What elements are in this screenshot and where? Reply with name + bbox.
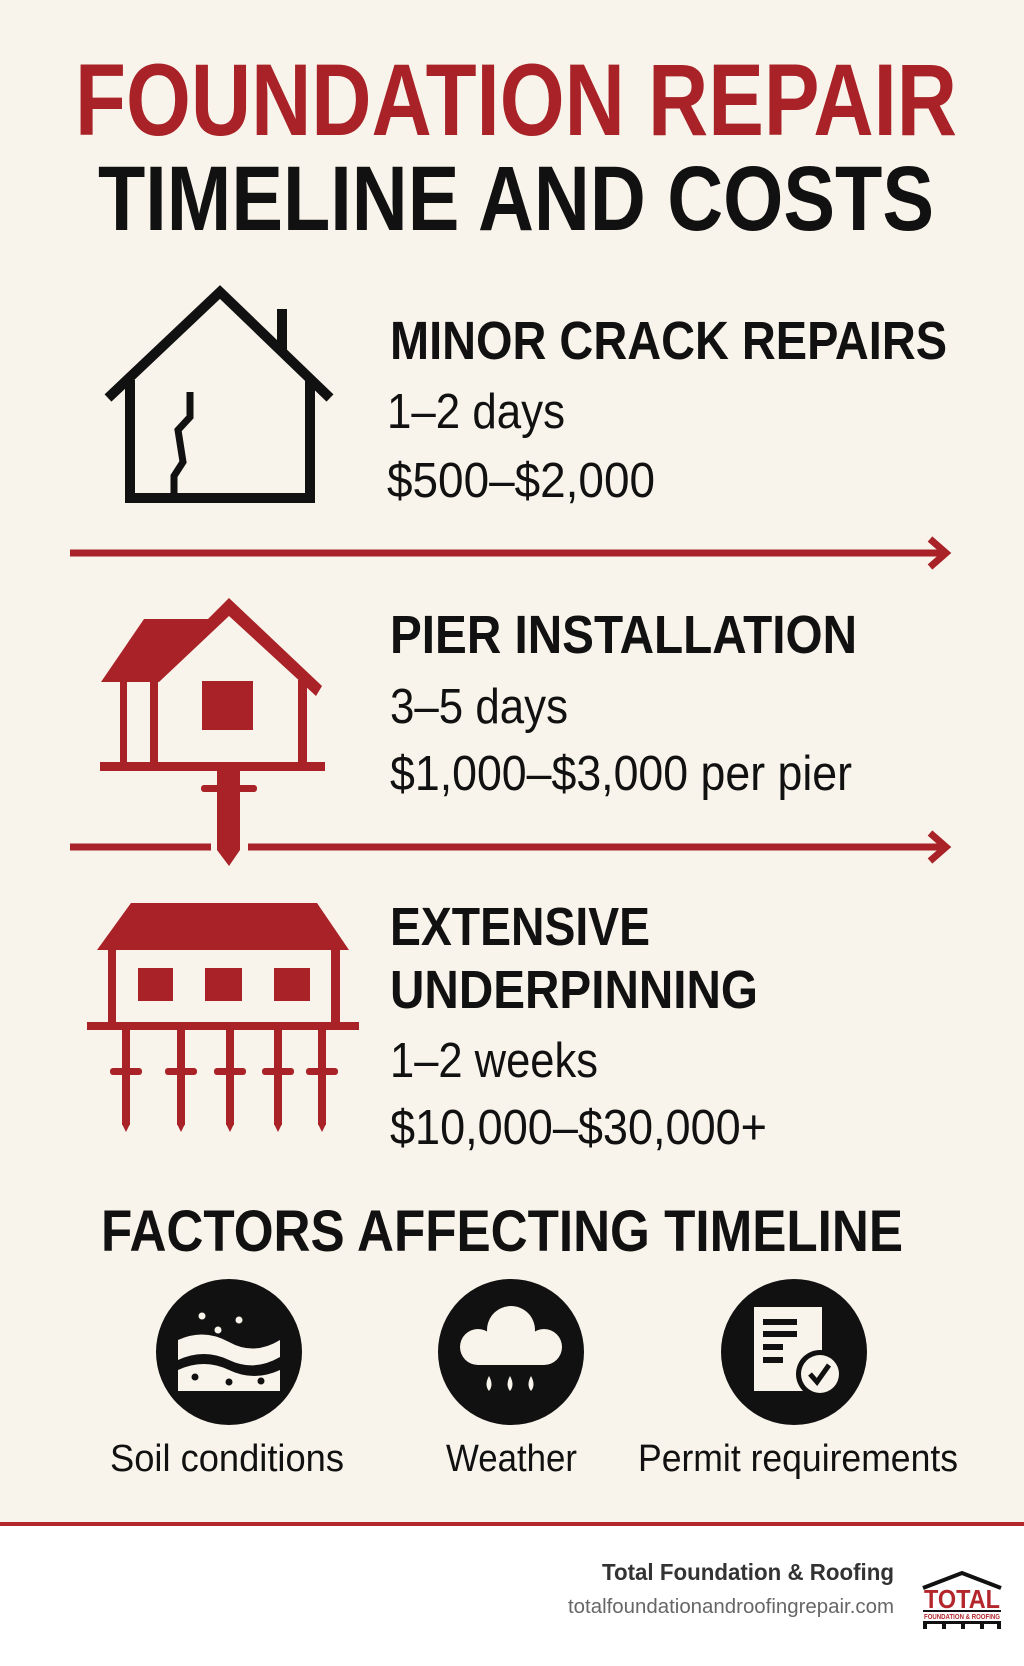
logo: FOUNDATION & ROOFING — [924, 1614, 1000, 1621]
panel: pier installation: $1,000–$3,000 per pier — [390, 747, 852, 801]
labels: factors — [110, 1438, 958, 1480]
footer text: totalfoundationandroofingrepair.com — [568, 1596, 894, 1618]
panel: extensive underpinning: 1–2 weeks — [390, 1034, 598, 1088]
arrow 2 — [70, 833, 946, 861]
icon: soil conditions — [156, 1279, 302, 1425]
arrow 1 — [70, 539, 946, 567]
panel: pier installation: PIER INSTALLATION — [390, 605, 857, 665]
icon: underpinning house — [87, 903, 359, 1132]
labels: factors: Permit requirements — [638, 1438, 958, 1480]
footer text — [568, 1559, 894, 1618]
labels: factors: Soil conditions — [110, 1438, 344, 1480]
panel: minor crack repairs — [387, 311, 947, 508]
panel: minor crack repairs: $500–$2,000 — [387, 454, 655, 508]
heading: factors: FACTORS AFFECTING TIMELINE — [101, 1199, 903, 1264]
title — [75, 43, 957, 250]
labels: factors: Weather — [446, 1438, 577, 1480]
panel: extensive underpinning: UNDERPINNING — [390, 960, 758, 1020]
footer text: Total Foundation & Roofing — [602, 1559, 894, 1585]
icon: permit — [721, 1279, 867, 1425]
icon: pier house — [100, 598, 325, 866]
panel: pier installation — [390, 605, 857, 801]
panel: minor crack repairs: MINOR CRACK REPAIRS — [390, 311, 947, 371]
logo — [923, 1573, 1001, 1629]
panel: pier installation: 3–5 days — [390, 680, 568, 734]
panel: extensive underpinning: EXTENSIVE — [390, 897, 650, 957]
icon: weather — [438, 1279, 584, 1425]
panel: extensive underpinning — [390, 897, 767, 1155]
panel: extensive underpinning: $10,000–$30,000+ — [390, 1101, 767, 1155]
panel: minor crack repairs: 1–2 days — [387, 385, 565, 439]
icon: house with crack — [108, 292, 330, 498]
logo: TOTAL — [924, 1584, 1000, 1614]
